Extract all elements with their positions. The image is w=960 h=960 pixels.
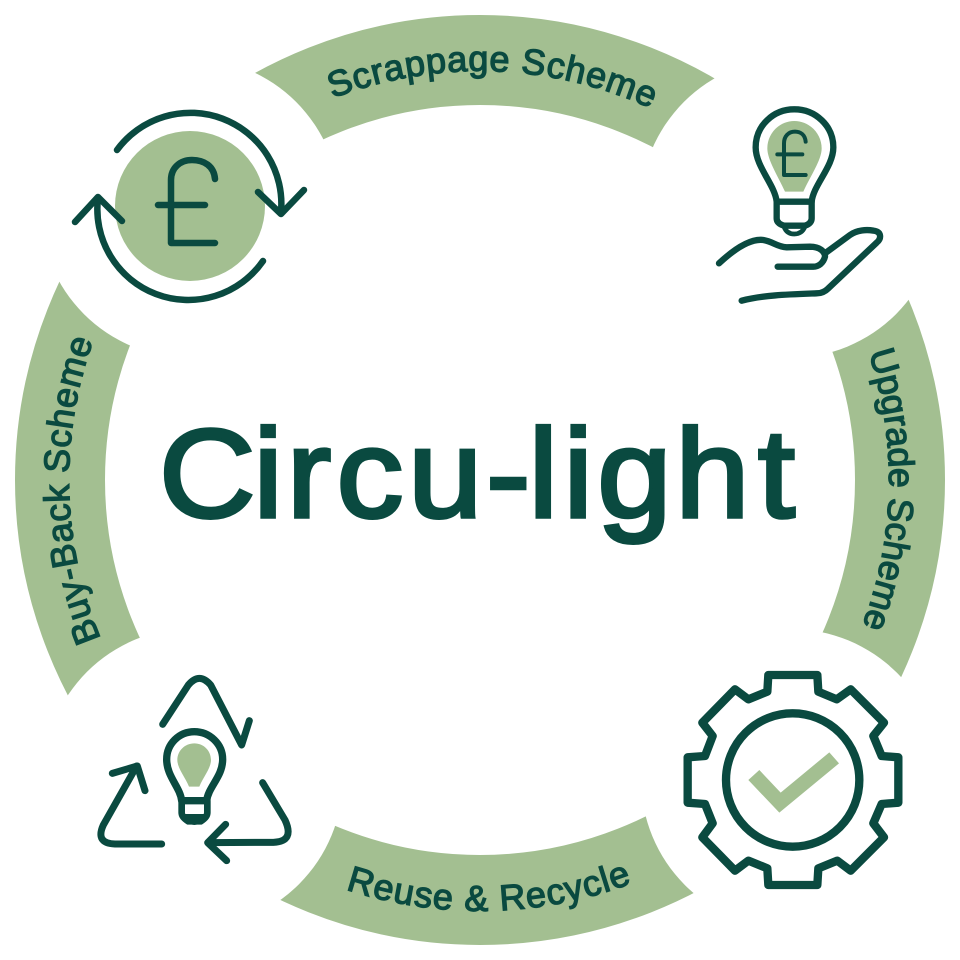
title: Circu-light [159,402,795,544]
label: Reuse & Recycle: Reuse & Recycle [348,865,630,912]
label: Buy-Back Scheme: Buy-Back Scheme [42,338,100,646]
icon: gear with check mark [688,675,898,885]
icon: recycle arrows with bulb [101,678,288,861]
label: Scrappage Scheme: Scrappage Scheme [328,48,656,106]
icon: pound with cycle arrows [75,113,304,300]
green ring [60,60,900,900]
label: Upgrade Scheme: Upgrade Scheme [864,347,916,630]
icon: light bulb over hand [719,109,880,301]
